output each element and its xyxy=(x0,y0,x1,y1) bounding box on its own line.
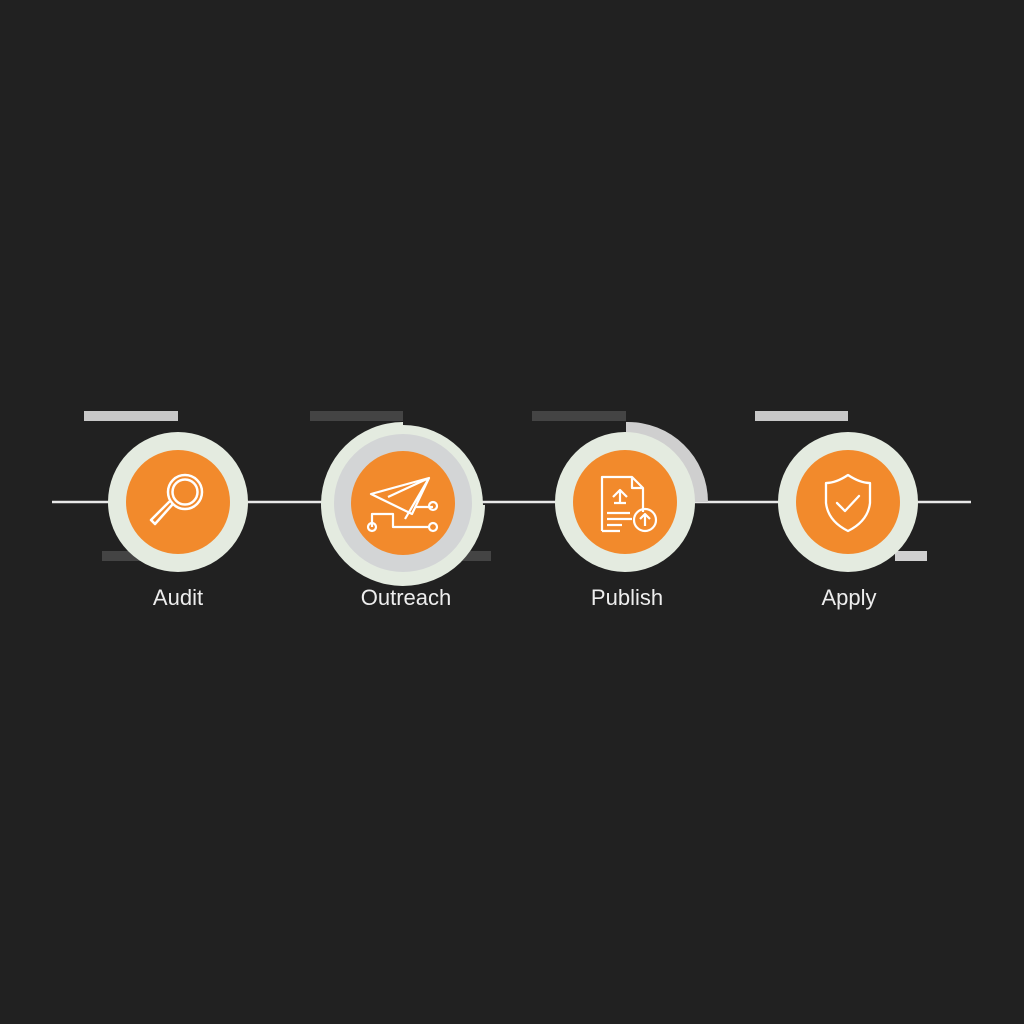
step 3: publish xyxy=(532,411,708,572)
timeline line xyxy=(52,501,971,503)
step 1: audit xyxy=(84,411,248,572)
icon: paper plane network xyxy=(368,478,437,531)
label: apply: Apply xyxy=(821,585,877,610)
label: publish: Publish xyxy=(591,585,663,610)
icon: magnifier xyxy=(151,475,202,524)
step 2: outreach xyxy=(310,411,491,586)
step 4: apply xyxy=(755,411,927,572)
label: audit: Audit xyxy=(153,585,203,610)
icon: document upload xyxy=(602,477,656,531)
label: outreach: Outreach xyxy=(361,585,451,610)
icon: shield check xyxy=(826,475,870,531)
